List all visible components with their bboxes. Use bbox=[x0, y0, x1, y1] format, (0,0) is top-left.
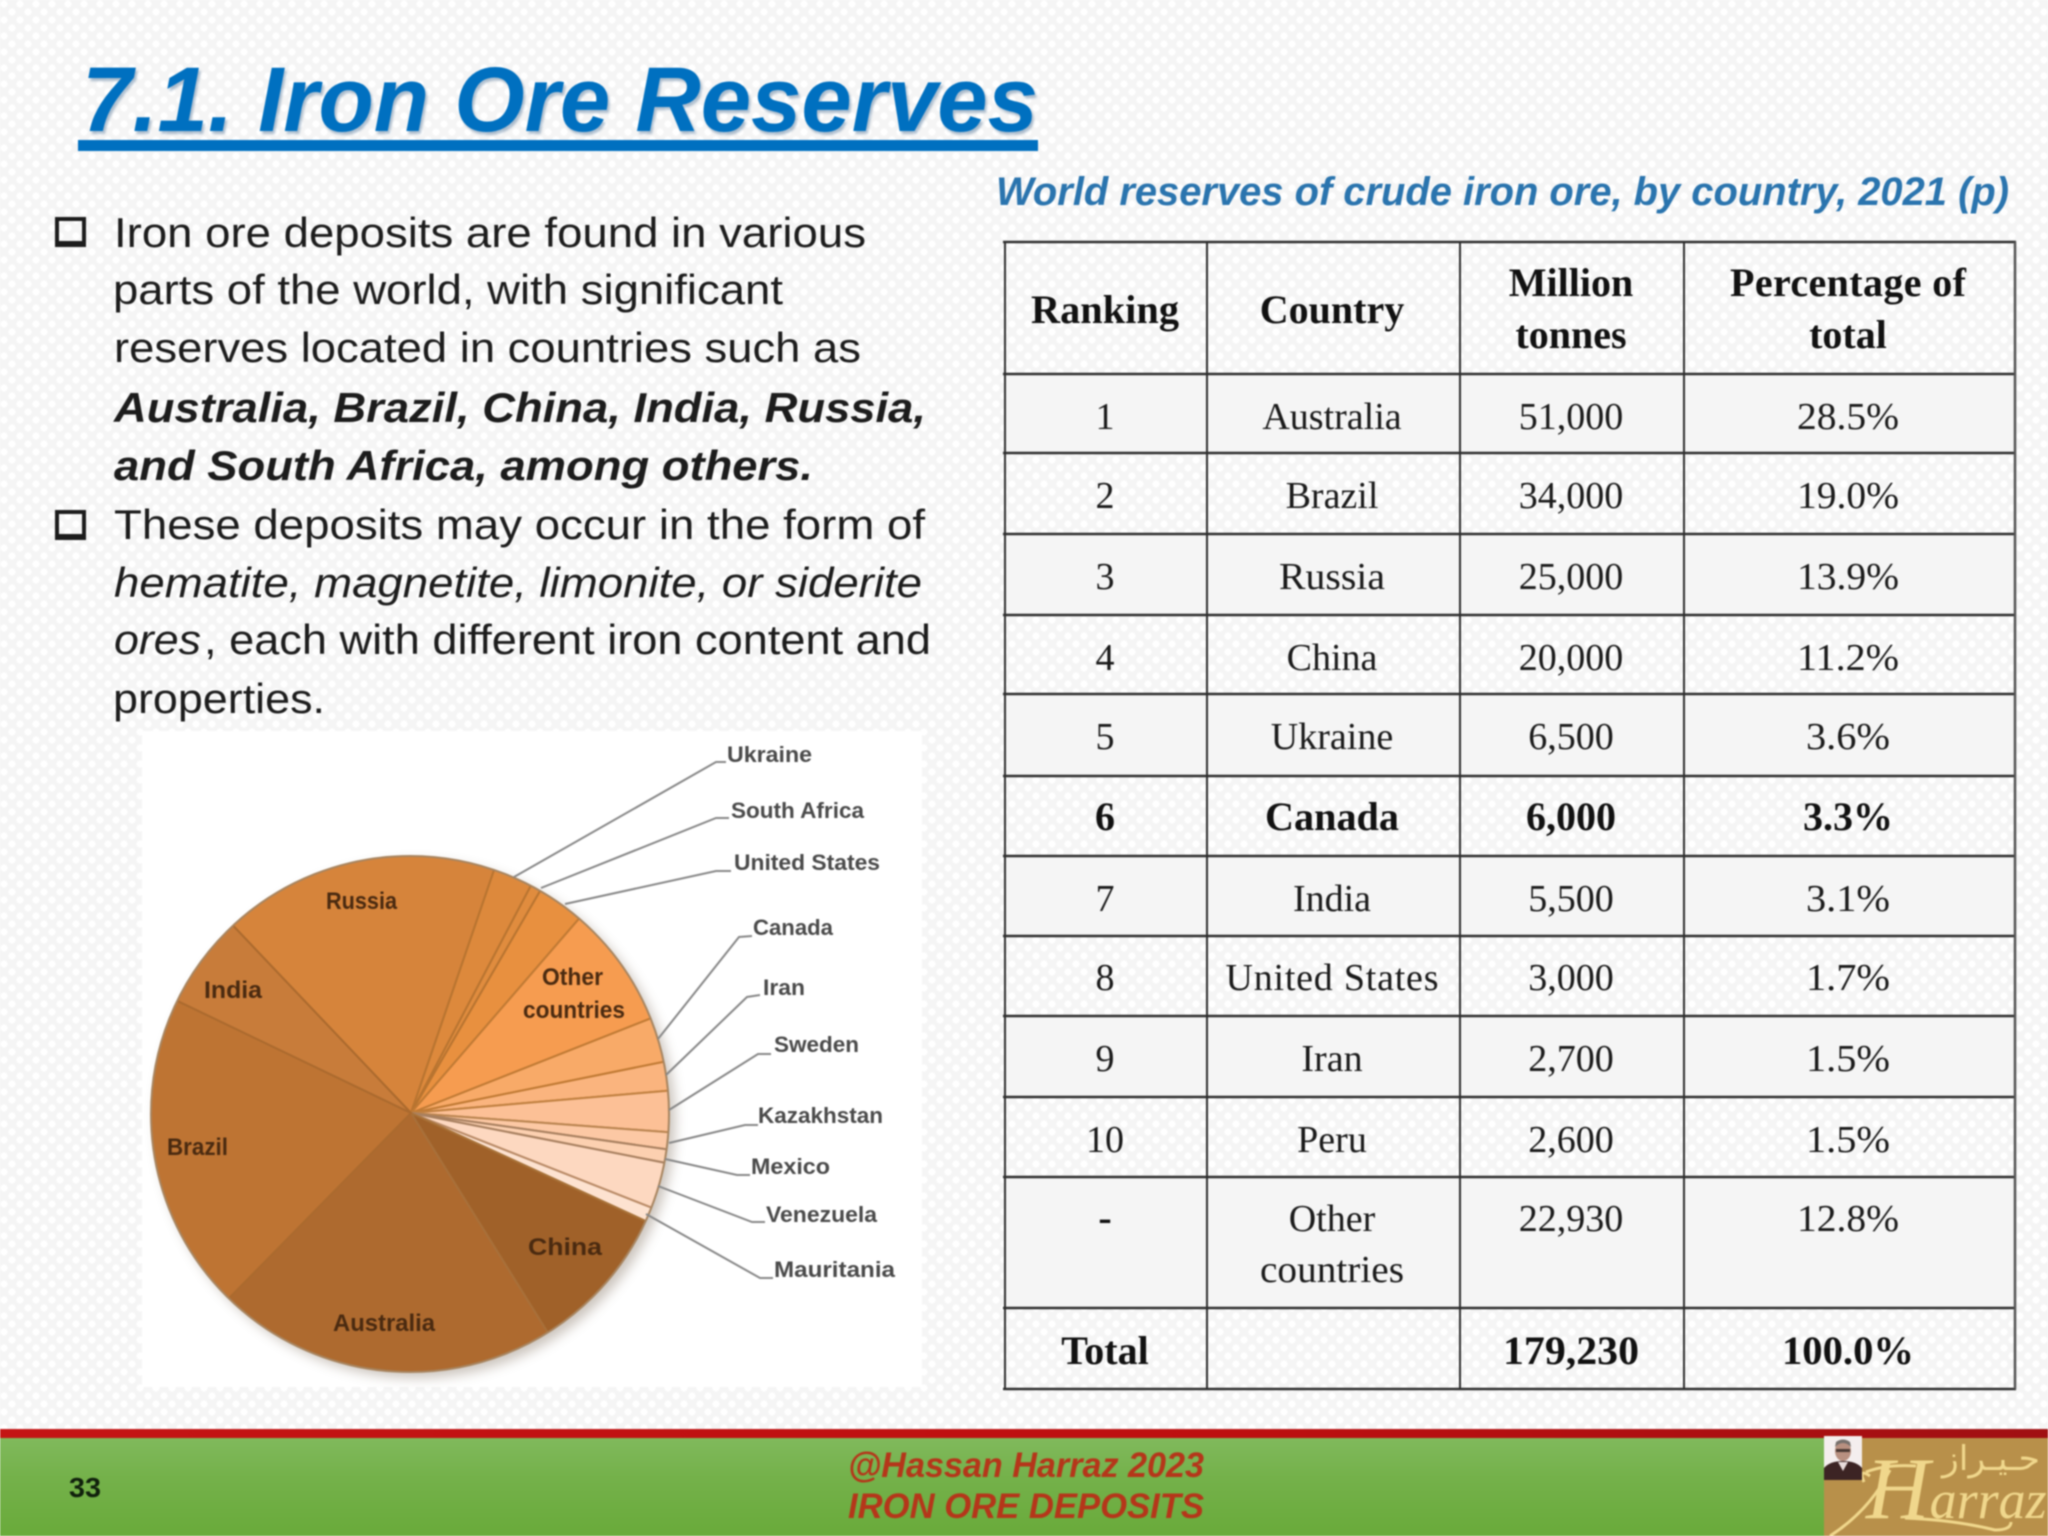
pie inner labels: countries bbox=[523, 997, 625, 1024]
row total bbox=[1061, 1328, 1914, 1373]
text block: deposit locations: Iron ore deposits are found in various bbox=[114, 209, 866, 256]
text block: ore types: properties. bbox=[113, 675, 325, 722]
pie outer labels: Iran bbox=[763, 975, 805, 1000]
row 1 Australia: Australia bbox=[1262, 396, 1402, 438]
row 10 Peru: 1.5% bbox=[1806, 1119, 1890, 1161]
row 4 China: 20,000 bbox=[1519, 637, 1623, 679]
row 3 Russia: 13.9% bbox=[1797, 556, 1899, 598]
row other countries: 12.8% bbox=[1797, 1198, 1899, 1240]
pie outer labels: South Africa bbox=[731, 798, 865, 823]
table header row: Country bbox=[1260, 287, 1404, 332]
row 6 Canada highlighted: 3.3% bbox=[1803, 794, 1893, 839]
row other countries: 22,930 bbox=[1519, 1198, 1623, 1240]
table heading: World reserves of crude iron ore, by country, 2021 (p) bbox=[996, 170, 2009, 214]
row other countries bbox=[1098, 1195, 1899, 1291]
icon: checkbox bullet bbox=[55, 510, 86, 540]
row 2 Brazil: 34,000 bbox=[1519, 475, 1623, 517]
table header row: tonnes bbox=[1515, 312, 1627, 357]
text block: ore types bbox=[55, 501, 931, 722]
row 4 China: 4 bbox=[1096, 637, 1114, 679]
row 2 Brazil: 19.0% bbox=[1797, 475, 1899, 517]
page number: 33 bbox=[69, 1472, 101, 1503]
row total: 100.0% bbox=[1782, 1328, 1914, 1373]
icon: portrait bbox=[1824, 1436, 1862, 1480]
row 8 United States: 1.7% bbox=[1806, 957, 1890, 999]
pie outer labels: Mauritania bbox=[774, 1257, 896, 1282]
row 9 Iran: Iran bbox=[1301, 1038, 1363, 1080]
row 7 India: 3.1% bbox=[1806, 878, 1890, 920]
pie inner labels: India bbox=[204, 977, 263, 1004]
table header row: Million bbox=[1509, 260, 1633, 305]
row 3 Russia bbox=[1096, 556, 1899, 598]
row other countries: - bbox=[1098, 1195, 1112, 1240]
text block: ore types: ores bbox=[114, 616, 201, 663]
row 6 Canada highlighted: Canada bbox=[1265, 794, 1399, 839]
row total: Total bbox=[1061, 1328, 1149, 1373]
text block: deposit locations bbox=[55, 209, 926, 489]
row 7 India bbox=[1096, 878, 1890, 920]
row 4 China: 11.2% bbox=[1797, 637, 1899, 679]
text block: deposit locations: and South Africa, among others. bbox=[114, 442, 813, 489]
footer credit bbox=[848, 1446, 1205, 1526]
table header row: Ranking bbox=[1031, 287, 1179, 332]
title: 7.1. Iron Ore Reserves bbox=[82, 49, 1038, 151]
row 2 Brazil bbox=[1096, 475, 1899, 517]
pie leader lines bbox=[514, 762, 773, 1278]
row 1 Australia: 51,000 bbox=[1519, 396, 1623, 438]
pie outer labels: United States bbox=[734, 850, 880, 875]
row 9 Iran: 2,700 bbox=[1528, 1038, 1614, 1080]
logo: Harraz: حـيـراز bbox=[1940, 1439, 2040, 1479]
row 5 Ukraine: Ukraine bbox=[1271, 716, 1393, 758]
row 2 Brazil: 2 bbox=[1096, 475, 1114, 517]
logo: Harraz: Harraz bbox=[1865, 1441, 2047, 1536]
text block: deposit locations: parts of the world, with significant bbox=[113, 266, 783, 313]
row 7 India: 7 bbox=[1096, 878, 1114, 920]
text block: ore types: , each with different iron content and bbox=[204, 616, 931, 663]
row 10 Peru: 10 bbox=[1086, 1119, 1124, 1161]
row 8 United States: United States bbox=[1226, 957, 1438, 999]
text block: ore types: hematite, magnetite, limonite, or siderite bbox=[114, 559, 922, 606]
pie outer labels bbox=[727, 742, 896, 1282]
row 3 Russia: Russia bbox=[1279, 556, 1385, 598]
row 9 Iran: 1.5% bbox=[1806, 1038, 1890, 1080]
row 4 China bbox=[1096, 637, 1899, 679]
pie outer labels: Ukraine bbox=[727, 742, 812, 767]
row 8 United States: 3,000 bbox=[1528, 957, 1614, 999]
pie inner labels: China bbox=[528, 1234, 603, 1261]
pie outer labels: Canada bbox=[753, 915, 834, 940]
pie outer labels: Sweden bbox=[774, 1032, 859, 1057]
row 7 India: 5,500 bbox=[1528, 878, 1614, 920]
row 3 Russia: 25,000 bbox=[1519, 556, 1623, 598]
row 5 Ukraine: 3.6% bbox=[1806, 716, 1890, 758]
footer bar bbox=[0, 1429, 2048, 1536]
row 5 Ukraine bbox=[1096, 716, 1890, 758]
table: world reserves by country bbox=[1003, 242, 2016, 1389]
table header row bbox=[1031, 260, 1967, 357]
row 6 Canada highlighted: 6,000 bbox=[1526, 794, 1616, 839]
pie slices bbox=[151, 856, 668, 1372]
pie outer labels: Kazakhstan bbox=[758, 1103, 883, 1128]
row 9 Iran bbox=[1096, 1038, 1890, 1080]
row 1 Australia: 28.5% bbox=[1797, 396, 1899, 438]
row 2 Brazil: Brazil bbox=[1286, 475, 1378, 517]
row 10 Peru: Peru bbox=[1297, 1119, 1367, 1161]
row 3 Russia: 3 bbox=[1096, 556, 1114, 598]
table header row: total bbox=[1809, 312, 1887, 357]
footer credit: @Hassan Harraz 2023 bbox=[848, 1446, 1205, 1485]
row 8 United States: 8 bbox=[1096, 957, 1114, 999]
row 1 Australia bbox=[1096, 396, 1899, 438]
panel: pie chart of iron ore reserves bbox=[111, 731, 922, 1394]
row other countries: countries bbox=[1260, 1249, 1404, 1291]
row 6 Canada highlighted: 6 bbox=[1095, 794, 1115, 839]
row 10 Peru: 2,600 bbox=[1528, 1119, 1614, 1161]
row other countries: Other bbox=[1289, 1198, 1376, 1240]
pie outer labels: Mexico bbox=[751, 1154, 830, 1179]
table header row: Percentage of bbox=[1730, 260, 1967, 305]
icon: checkbox bullet bbox=[55, 217, 86, 247]
pie inner labels: Australia bbox=[333, 1310, 436, 1337]
pie inner labels bbox=[167, 888, 625, 1337]
row 5 Ukraine: 5 bbox=[1096, 716, 1114, 758]
text block: deposit locations: reserves located in countries such as bbox=[114, 324, 861, 371]
pie outer labels: Venezuela bbox=[766, 1202, 878, 1227]
row 7 India: India bbox=[1293, 878, 1371, 920]
text block: deposit locations: Australia, Brazil, China, India, Russia, bbox=[113, 384, 926, 431]
row 5 Ukraine: 6,500 bbox=[1528, 716, 1614, 758]
text block: ore types: These deposits may occur in the form of bbox=[114, 501, 925, 548]
pie inner labels: Brazil bbox=[167, 1134, 228, 1161]
pie inner labels: Russia bbox=[326, 888, 398, 915]
pie inner labels: Other bbox=[542, 964, 603, 991]
row 10 Peru bbox=[1086, 1119, 1890, 1161]
row total: 179,230 bbox=[1503, 1328, 1639, 1373]
row 8 United States bbox=[1096, 957, 1890, 999]
footer credit: IRON ORE DEPOSITS bbox=[848, 1487, 1204, 1526]
row 1 Australia: 1 bbox=[1096, 396, 1114, 438]
row 4 China: China bbox=[1287, 637, 1378, 679]
row 9 Iran: 9 bbox=[1096, 1038, 1114, 1080]
pie shadow bbox=[157, 862, 675, 1378]
row 6 Canada highlighted bbox=[1095, 794, 1893, 839]
